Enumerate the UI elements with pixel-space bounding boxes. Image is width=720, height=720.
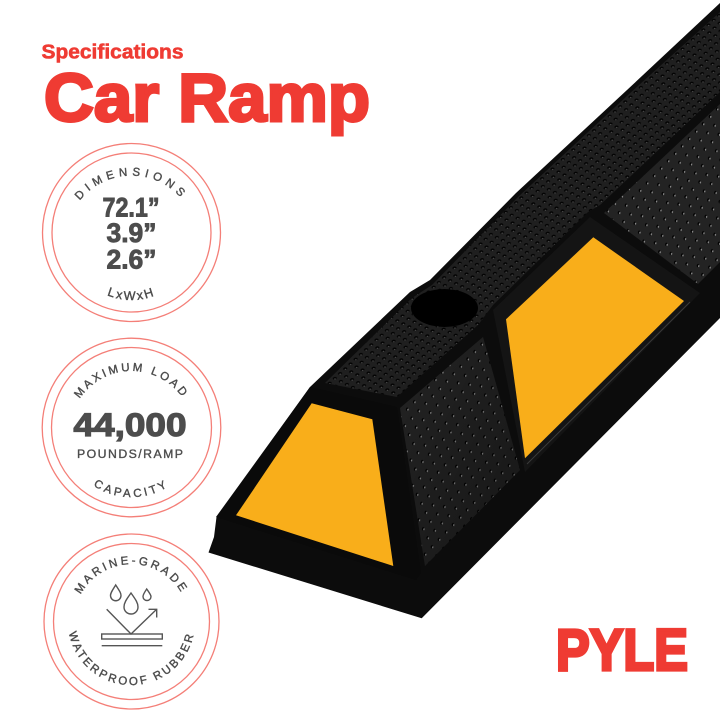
ramp silhouette [208,3,720,618]
badge: marine-grade waterproof rubber: MARINE-GRADE [74,556,188,594]
badge: maximum load: MAXIMUM LOAD [74,362,186,398]
badge: maximum load [42,338,222,518]
far textured side face [604,104,720,284]
mounting hole [411,289,478,327]
icon: water drops repelled by surface [102,585,162,646]
badge: dimensions [42,142,222,322]
badge: dimensions: 2.6” [106,244,156,274]
badge: maximum load: POUNDS/RAMP [77,447,183,461]
badge: maximum load: 44,000 [74,407,186,443]
logo: PYLE: PYLE [556,618,688,683]
badge: dimensions: DIMENSIONS [74,168,185,200]
front bevel [216,387,421,580]
badge: marine-grade waterproof rubber [43,533,220,710]
badge: maximum load: CAPACITY [94,480,164,498]
subtitle: Specifications: Specifications [42,40,184,64]
side yellow reflector [506,237,684,458]
front yellow reflector [236,403,393,566]
title: Car Ramp: Car Ramp [44,60,370,136]
badge: dimensions: LxWxH [108,287,154,300]
reflector shadow line [527,302,690,464]
textured top face [325,12,720,397]
textured side face [400,337,520,566]
badge: dimensions: 72.1” [102,192,160,222]
badge: dimensions: 3.9” [106,218,156,248]
raised reflector panel [493,217,700,472]
product photo: car ramp [208,3,720,618]
badge: marine-grade waterproof rubber: WATERPROOF RUBBER [69,630,194,686]
